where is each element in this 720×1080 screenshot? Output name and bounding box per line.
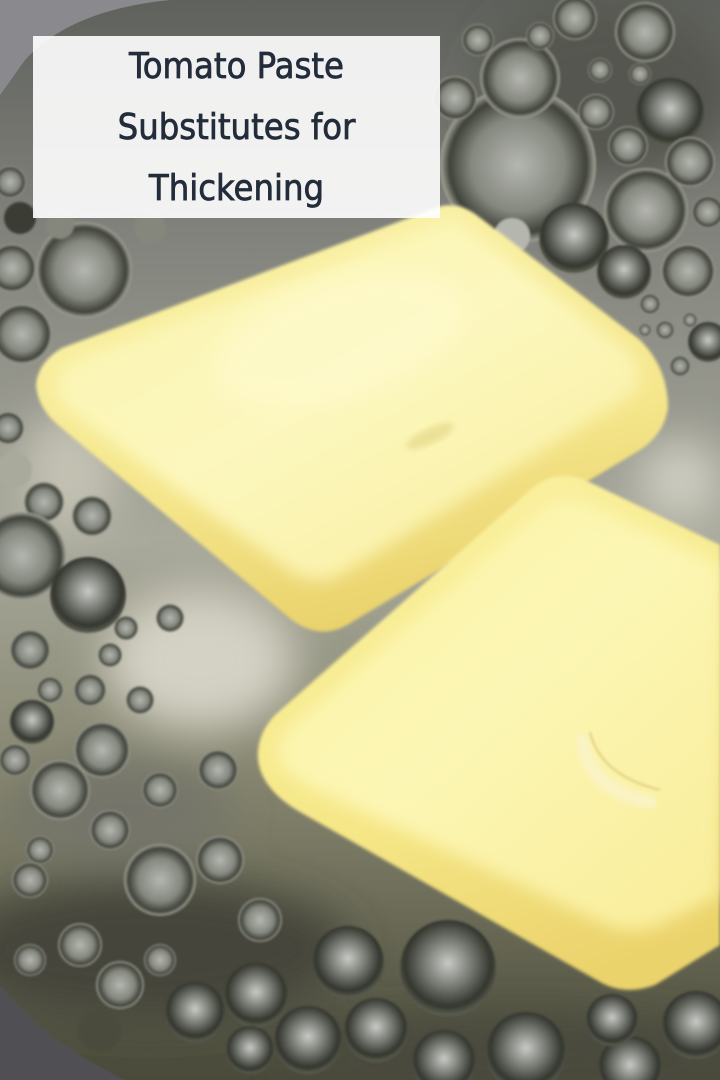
top bubbles	[433, 0, 720, 376]
title card	[33, 36, 440, 218]
title card: Tomato Paste	[129, 46, 344, 87]
left bubbles	[0, 166, 282, 942]
title card: Thickening	[149, 168, 324, 209]
pan rim corners	[0, 0, 170, 1080]
bottom bubbles	[12, 862, 720, 1080]
title card: Substitutes for	[118, 107, 355, 148]
butter pat: lower	[258, 476, 720, 990]
butter pat: upper	[36, 205, 668, 632]
